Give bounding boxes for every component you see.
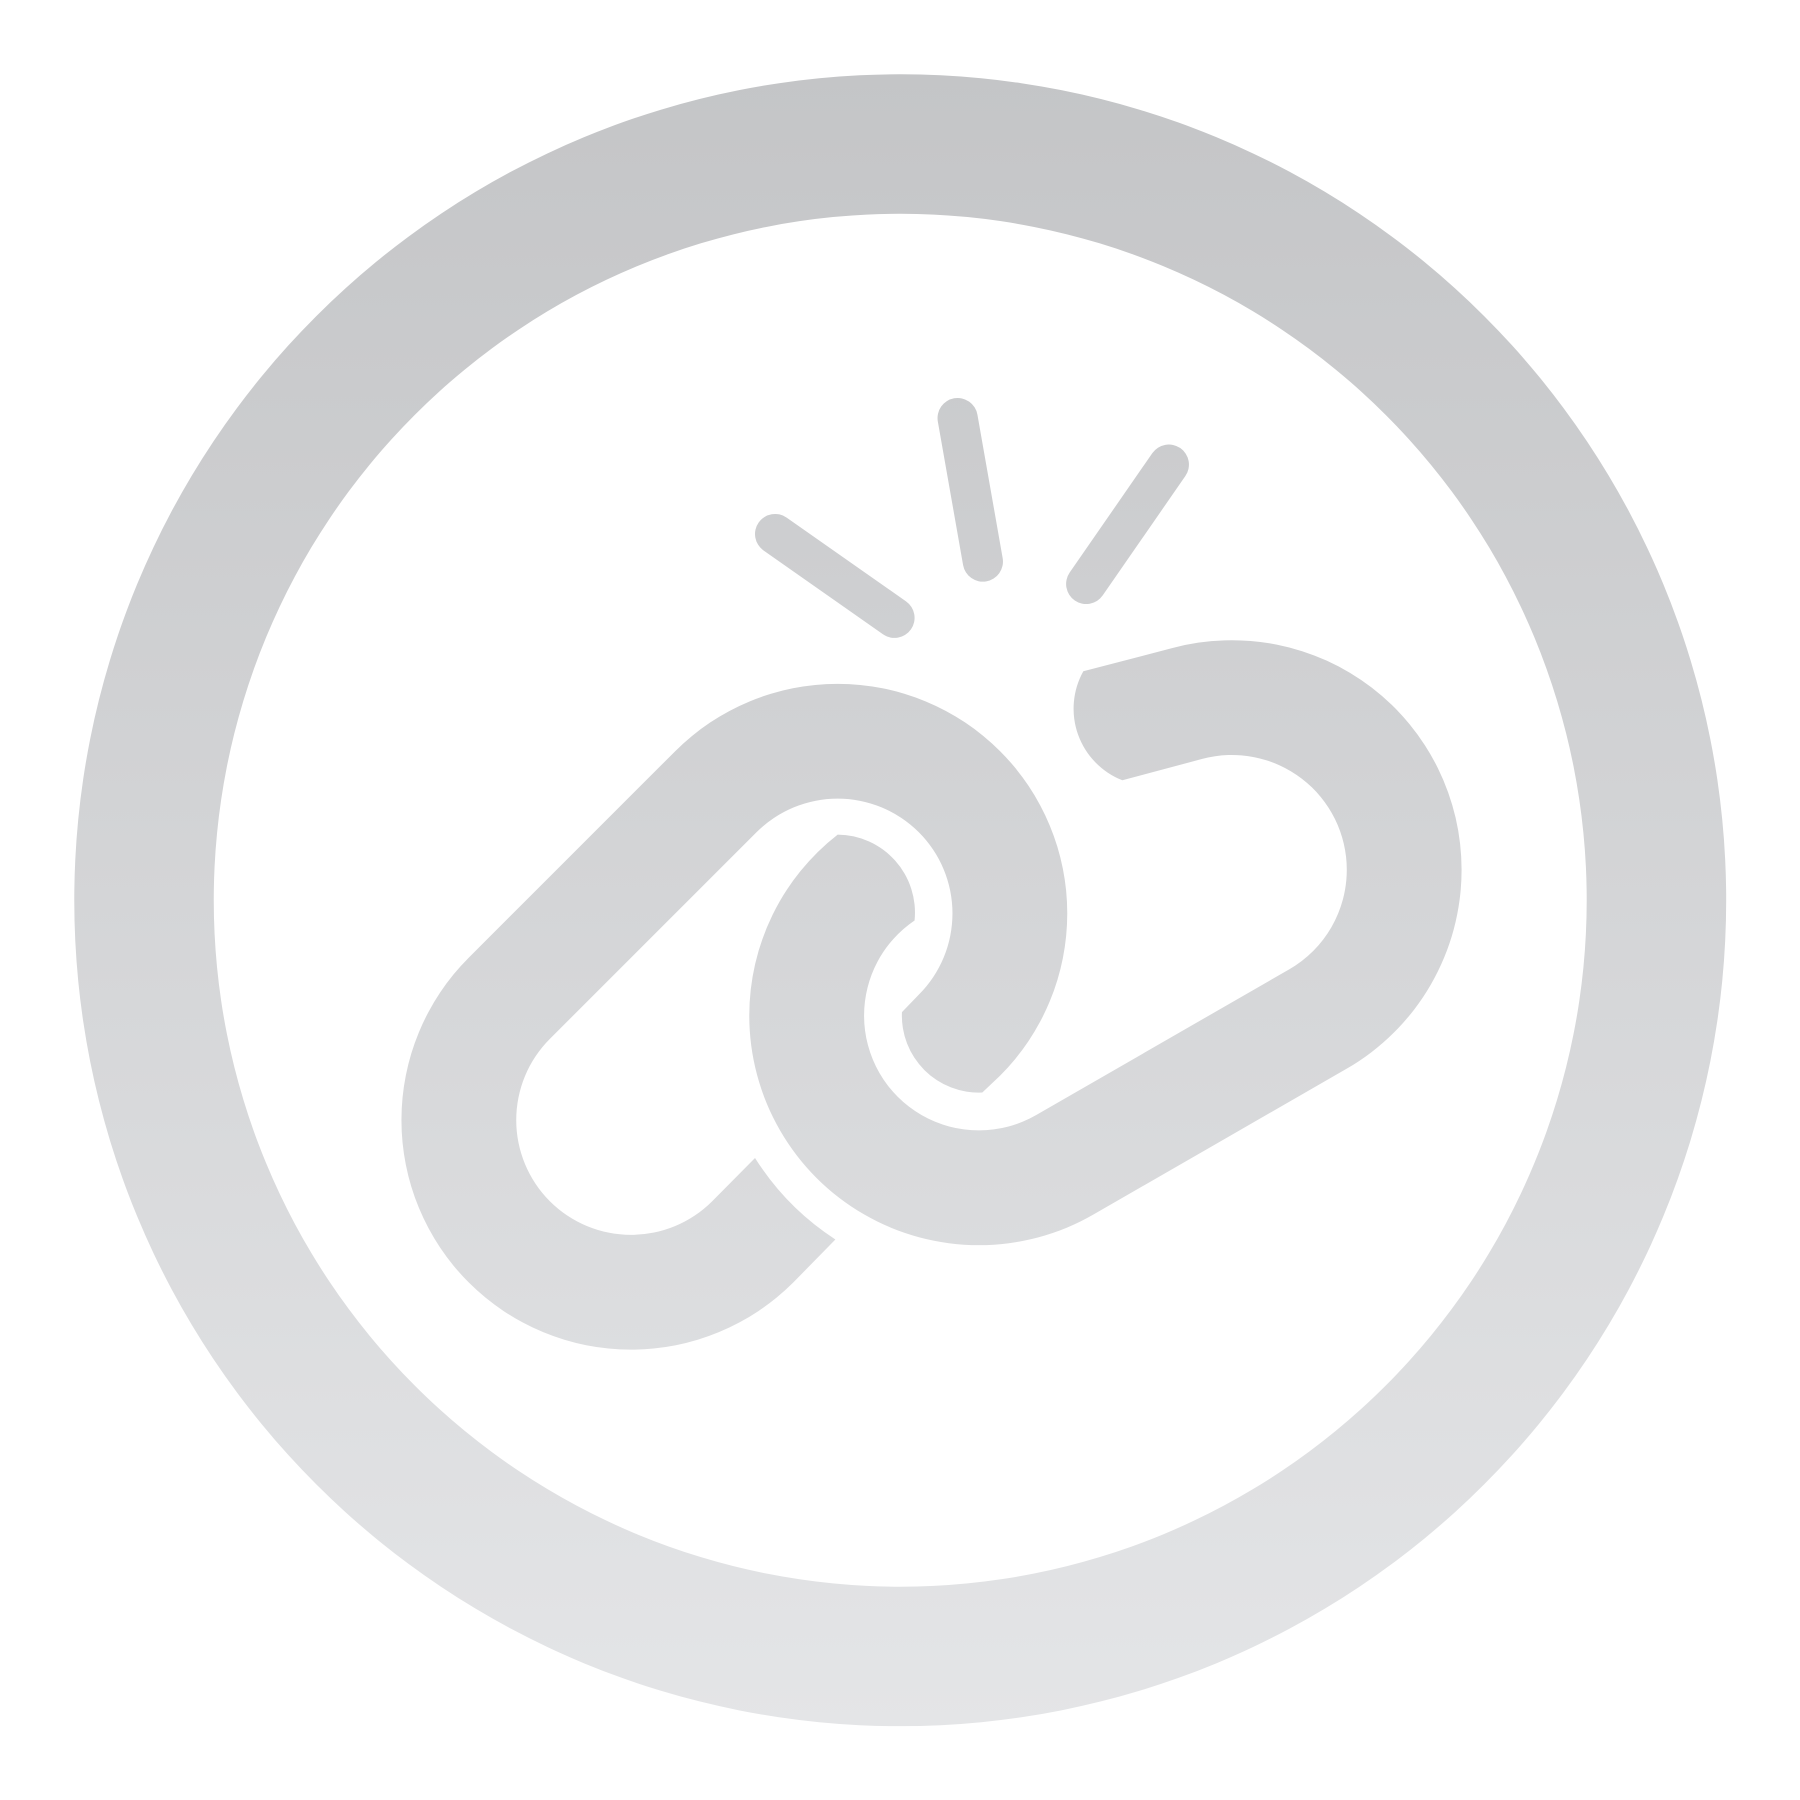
spark lines <box>775 418 1169 618</box>
left chain link <box>401 684 1067 1350</box>
spark: right <box>1086 465 1169 584</box>
right chain link <box>749 640 1462 1245</box>
spark: left <box>775 534 894 618</box>
spark: middle <box>958 418 983 562</box>
